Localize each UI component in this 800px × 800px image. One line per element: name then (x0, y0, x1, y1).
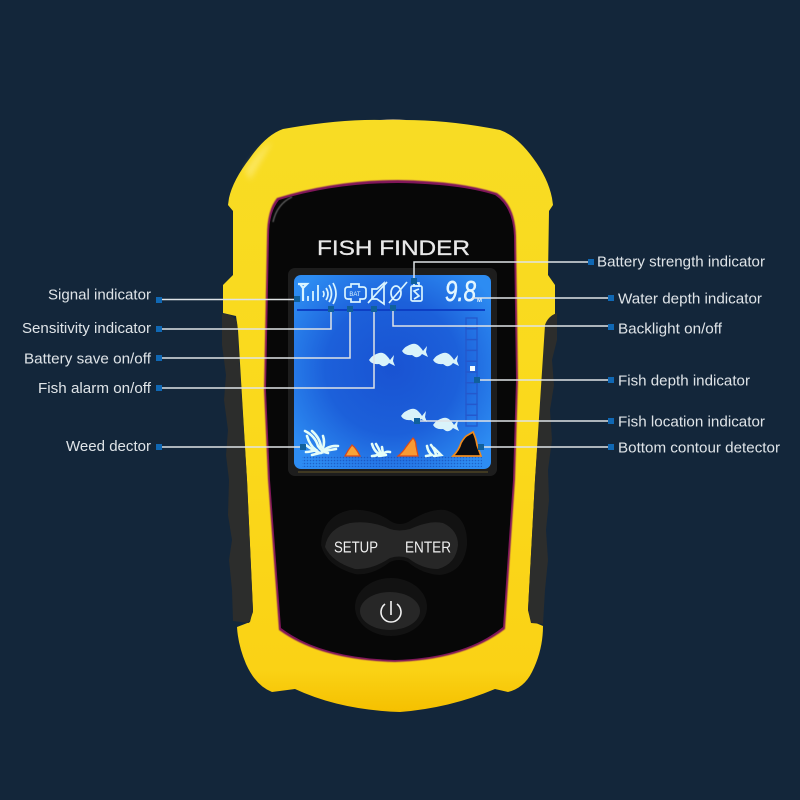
fish 3 (433, 353, 459, 366)
depth scale (466, 318, 477, 426)
icon: backlight off (389, 282, 407, 303)
label: Weed dector (66, 439, 151, 455)
power button outer (355, 578, 427, 636)
label: Fish depth indicator (618, 374, 750, 390)
rock medium (398, 438, 418, 456)
screen background (294, 275, 491, 469)
label: Sensitivity indicator (22, 321, 151, 337)
callout: fish depth indicator (474, 374, 750, 390)
shoulder highlight left (245, 142, 272, 180)
callout: sensitivity indicator (22, 306, 334, 337)
fish 2 (402, 344, 428, 357)
rocker face (325, 522, 458, 569)
left rubber grip (222, 314, 253, 623)
magenta rim of face (264, 180, 518, 662)
marker and leader (160, 446, 303, 448)
marker and leader (414, 262, 590, 280)
weed medium (372, 444, 390, 456)
callout: weed dector (66, 439, 306, 455)
icon: fish alarm off (368, 282, 387, 304)
screen bottom trim (298, 471, 488, 473)
power button (355, 578, 427, 636)
bottom contour black rock (453, 432, 481, 456)
top metal stud (380, 119, 406, 128)
power button face (360, 592, 420, 630)
weed small (426, 445, 441, 456)
icon: battery save: BAT (349, 292, 361, 298)
weed large (305, 431, 338, 455)
label: Signal indicator (48, 288, 151, 304)
label: Fish location indicator (618, 414, 765, 430)
callout: fish alarm on/off (38, 306, 377, 397)
marker and leader (160, 309, 350, 358)
fish 4 (401, 409, 427, 422)
yellow body (223, 120, 555, 712)
label: Battery strength indicator (597, 254, 765, 270)
callout: battery strength indicator (411, 254, 765, 284)
marker and leader (481, 446, 610, 448)
marker and leader (477, 379, 610, 381)
right rubber grip (528, 313, 557, 624)
marker and leader (393, 309, 610, 326)
icon: battery (411, 283, 422, 301)
callout: water depth indicator (472, 292, 762, 308)
label: Bottom contour detector (618, 440, 780, 456)
LCD screen (294, 275, 491, 472)
callout: signal indicator (48, 288, 300, 304)
rocker outline (321, 510, 467, 575)
depth unit: M (477, 298, 482, 304)
setup and enter rocker button (321, 510, 467, 575)
icon: battery save (345, 284, 366, 302)
fish 5 (433, 418, 459, 431)
label: Water depth indicator (618, 292, 762, 308)
marker and leader (160, 298, 297, 300)
icon: power (381, 601, 401, 622)
rock small (345, 445, 360, 456)
black face panel (266, 183, 516, 660)
label: Battery save on/off (24, 352, 152, 368)
setup label: SETUP (334, 540, 378, 556)
label: Backlight on/off (618, 322, 723, 338)
status bar divider (297, 309, 485, 311)
marker and leader (417, 420, 610, 422)
icon: signal (298, 283, 336, 304)
device: fish finder (222, 119, 557, 712)
enter label: ENTER (405, 540, 451, 556)
depth readout: 9.8 (445, 276, 476, 308)
face highlight (273, 197, 292, 222)
label: Fish alarm on/off (38, 381, 152, 397)
callout: fish location indicator (414, 414, 765, 430)
callout: battery save on/off (24, 306, 353, 368)
depth marker (470, 366, 475, 371)
callout: backlight on/off (390, 305, 723, 338)
marker and leader (472, 297, 610, 299)
fish 1 (369, 353, 395, 366)
screen bezel (288, 268, 497, 476)
bottom dotted band (302, 456, 482, 467)
title: FISH FINDER (317, 237, 470, 260)
callout: bottom contour detector (478, 440, 780, 456)
marker and leader (160, 309, 374, 388)
marker and leader (160, 309, 331, 329)
